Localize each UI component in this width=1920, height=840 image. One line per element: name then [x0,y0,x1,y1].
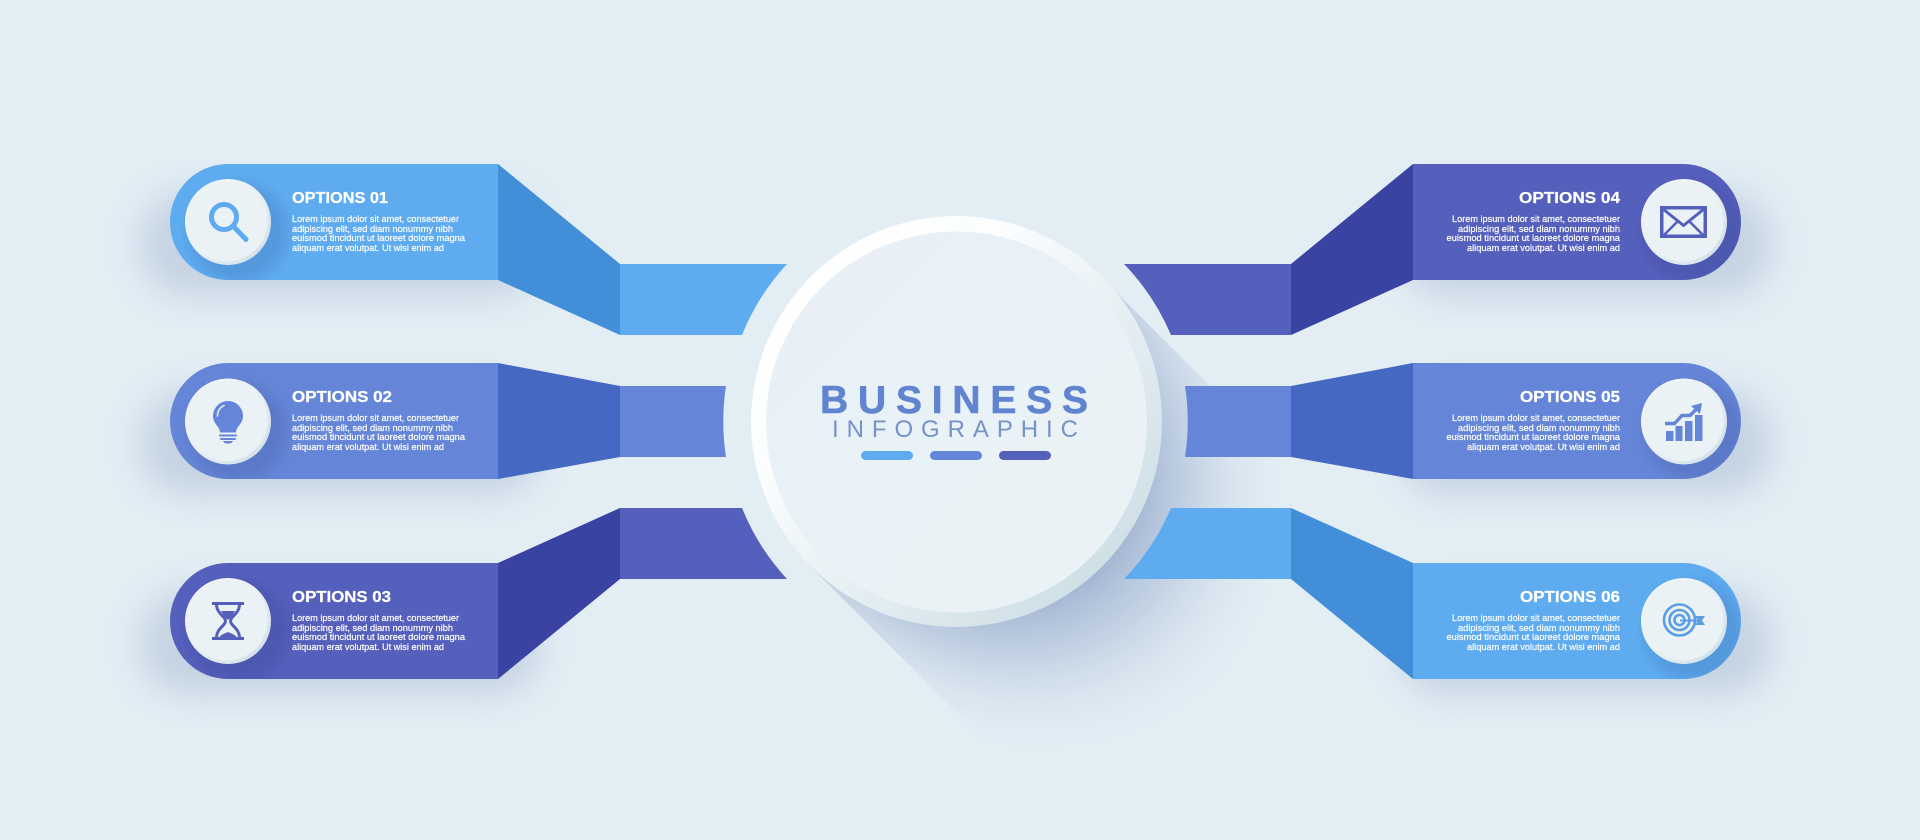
body text 03 [292,613,466,653]
body text 04 [1446,214,1621,254]
icon disc 05 [1641,378,1727,464]
icon: growth chart [1665,403,1702,441]
body text 03: adipiscing elit, sed diam nonummy nibh [292,623,453,634]
body text 02 [292,413,466,453]
panel: option 04 [1124,164,1752,335]
connector band 03 [620,508,787,579]
body text 04: Lorem ipsum dolor sit amet, consectetuer [1452,214,1620,225]
body text 05: adipiscing elit, sed diam nonummy nibh [1458,423,1620,434]
pill 06 [1413,563,1741,679]
accent dashes [861,451,1051,460]
pill drop shadows [140,192,1772,695]
fold 02 [498,363,620,479]
fold 01 [498,164,620,335]
connector band 04 [1124,264,1291,335]
body text 02: euismod tincidunt ut laoreet dolore magna [292,432,466,443]
central circle [751,216,1162,627]
body text 05: euismod tincidunt ut laoreet dolore magna [1446,432,1621,443]
title: business: BUSINESS [820,379,1088,422]
body text 01: adipiscing elit, sed diam nonummy nibh [292,224,453,235]
panel: option 01 [170,164,787,335]
body text 05: aliquam erat volutpat. Ut wisi enim ad [1467,442,1620,453]
fold 06 [1291,508,1413,679]
body text 01: Lorem ipsum dolor sit amet, consectetuer [292,214,459,225]
connector band 05 [1185,386,1291,457]
icon: hourglass [212,604,244,638]
body text 06: euismod tincidunt ut laoreet dolore magna [1446,632,1621,643]
pill 03 [170,563,498,679]
pill 01 [170,164,498,280]
panel: option 03 [170,508,787,689]
icon disc 02 [185,378,271,464]
icon disc 04 [1641,179,1727,265]
body text 03: euismod tincidunt ut laoreet dolore magna [292,632,466,643]
icon disc 03 [185,578,271,664]
icon: magnifier [212,204,246,240]
body text 06: Lorem ipsum dolor sit amet, consectetuer [1452,613,1620,624]
panel: option 06 [1124,508,1752,689]
disc shadow 02 [191,384,286,479]
subtitle: infographic: INFOGRAPHIC [832,416,1078,443]
central circle long shadow [811,277,1371,837]
body text 04: euismod tincidunt ut laoreet dolore magna [1446,233,1621,244]
heading 03: OPTIONS 03 [292,589,391,606]
body text 03: aliquam erat volutpat. Ut wisi enim ad [292,642,444,653]
body text 01: aliquam erat volutpat. Ut wisi enim ad [292,243,444,254]
body text 01: euismod tincidunt ut laoreet dolore magna [292,233,466,244]
heading 05: OPTIONS 05 [1520,389,1620,406]
body text 02: aliquam erat volutpat. Ut wisi enim ad [292,442,444,453]
body text 05: Lorem ipsum dolor sit amet, consectetuer [1452,413,1620,424]
connector band 01 [620,264,787,335]
body text 05 [1446,413,1621,453]
disc shadow 04 [1654,192,1740,278]
body text 06 [1446,613,1621,653]
body text 06: aliquam erat volutpat. Ut wisi enim ad [1467,642,1620,653]
disc shadow 01 [188,182,288,280]
body text 04: aliquam erat volutpat. Ut wisi enim ad [1467,243,1620,254]
circle face [766,232,1147,612]
icon disc 06 [1641,578,1727,664]
icon: light bulb [213,401,243,444]
body text 02: adipiscing elit, sed diam nonummy nibh [292,423,453,434]
heading 01: OPTIONS 01 [292,190,388,207]
circle rim [751,216,1162,627]
icon disc 01 [185,179,271,265]
body text 04: adipiscing elit, sed diam nonummy nibh [1458,224,1620,235]
pill 04 [1413,164,1741,280]
pill 05 [1413,363,1741,479]
connector band 02 [620,386,726,457]
fold 03 [498,508,620,679]
pill 02 [170,363,498,479]
panel: option 02 [170,363,726,490]
body text 06: adipiscing elit, sed diam nonummy nibh [1458,623,1620,634]
icon: envelope [1662,208,1705,236]
connector band 06 [1124,508,1291,579]
heading 02: OPTIONS 02 [292,389,392,406]
panel: option 05 [1185,363,1741,479]
body text 03: Lorem ipsum dolor sit amet, consectetuer [292,613,459,624]
fold 05 [1291,363,1413,479]
body text 01 [292,214,466,254]
disc shadow 03 [198,591,284,676]
heading 04: OPTIONS 04 [1519,190,1620,207]
heading 06: OPTIONS 06 [1520,589,1620,606]
fold 04 [1291,164,1413,335]
disc shadow 05 [1647,384,1740,478]
body text 02: Lorem ipsum dolor sit amet, consectetuer [292,413,459,424]
disc shadow 06 [1644,581,1741,679]
icon: target [1664,604,1705,636]
